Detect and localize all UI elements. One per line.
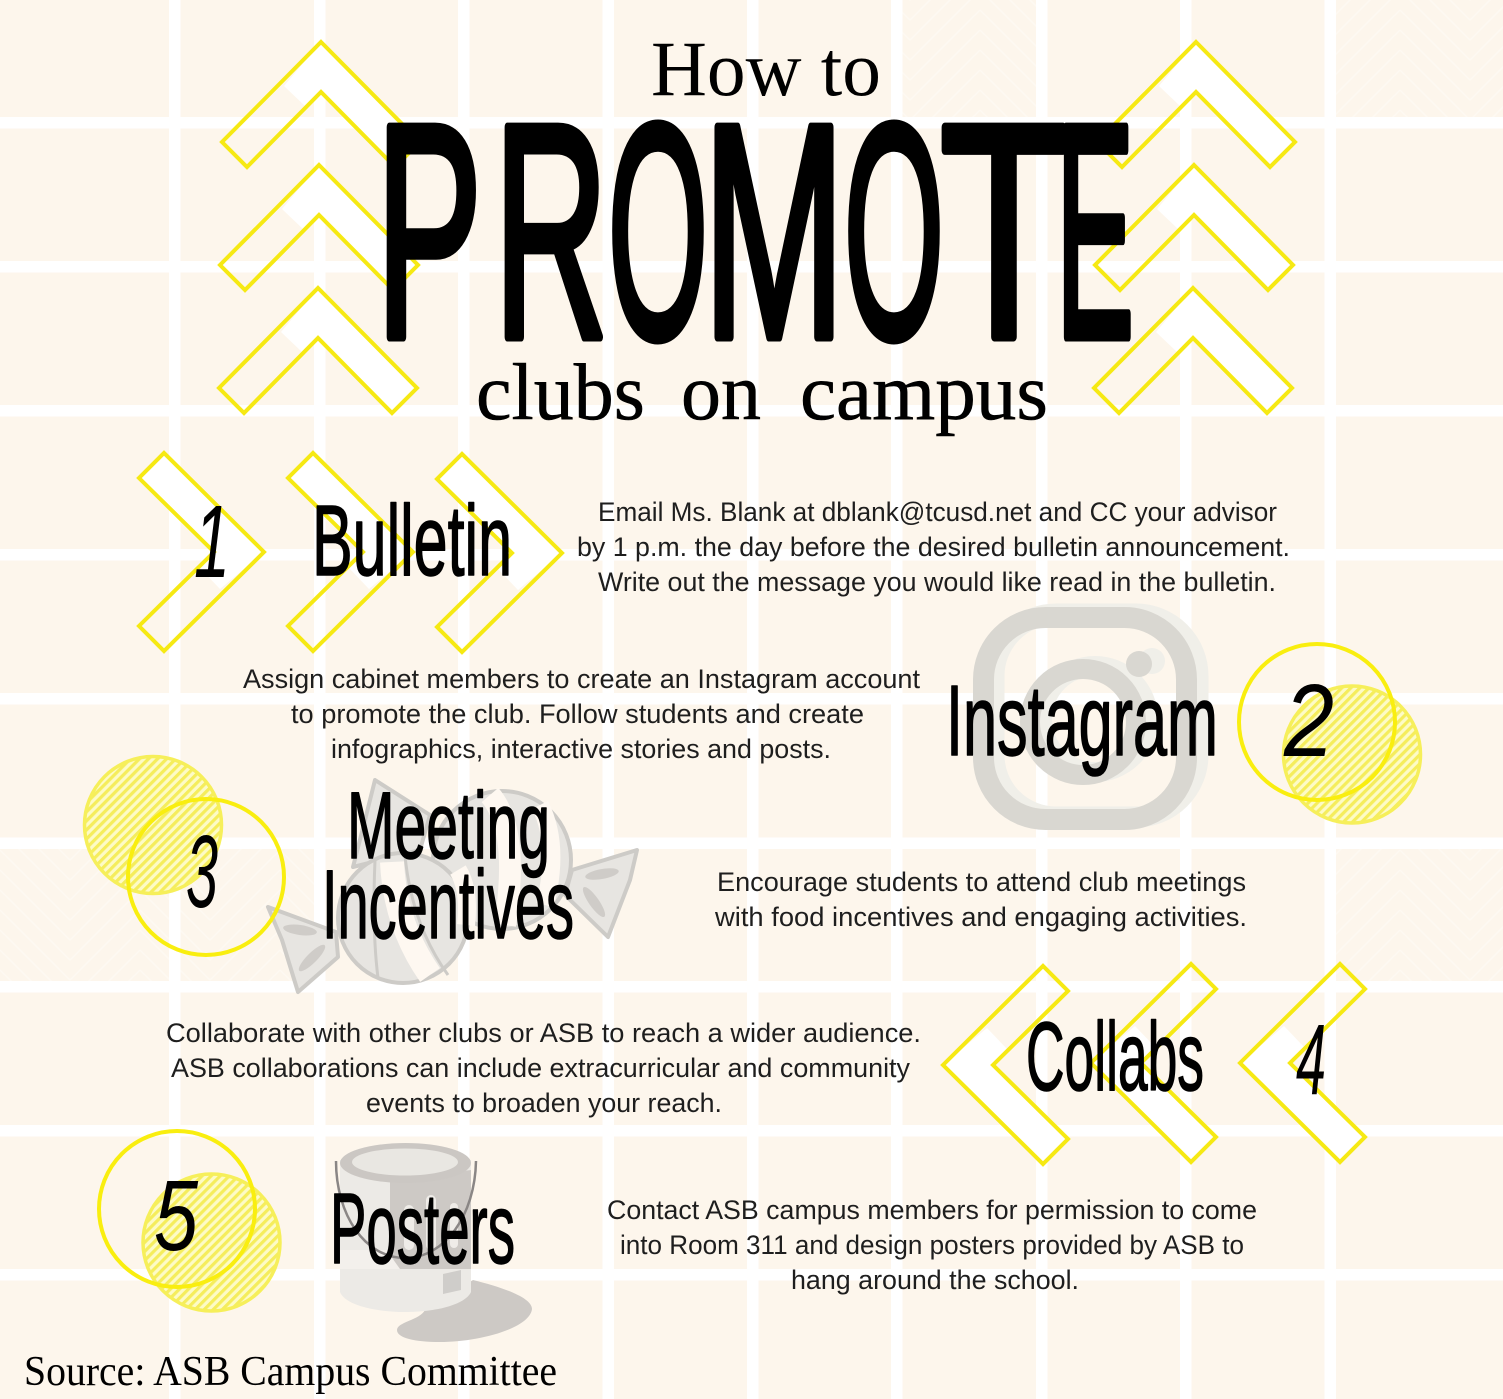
step 1 heading: Bulletin: Bulletin	[312, 485, 512, 597]
icon: left up chevrons	[219, 42, 420, 413]
title: PROMOTE: M	[703, 61, 845, 402]
step 5 description: hang around the school.	[791, 1265, 1079, 1295]
step 3 heading: Meeting Incentives: Meeting	[347, 773, 550, 879]
icon: paint bucket	[336, 1143, 532, 1342]
step 3 description: with food incentives and engaging activities.	[714, 902, 1247, 932]
step 2 description: infographics, interactive stories and posts.	[331, 734, 831, 764]
step 4 number: 4	[1296, 1004, 1326, 1116]
step 1 description: Write out the message you would like read in the bulletin.	[598, 567, 1276, 597]
step 4 description	[166, 1018, 921, 1118]
step 3 heading: Meeting Incentives	[322, 773, 574, 959]
icon: right up chevrons	[1094, 42, 1295, 413]
step 2 description	[243, 664, 920, 764]
step 2 circles	[1239, 644, 1420, 823]
step 4 heading: Collabs: Collabs	[1026, 1002, 1204, 1111]
step 2 description: to promote the club. Follow students and create	[291, 699, 864, 729]
step 2 description: Assign cabinet members to create an Instagram account	[243, 664, 920, 694]
step 3 heading: Meeting Incentives: Incentives	[322, 850, 574, 959]
title: PROMOTE: R	[494, 61, 608, 402]
step 5 description	[607, 1195, 1257, 1295]
step 1 description: by 1 p.m. the day before the desired bulletin announcement.	[577, 532, 1290, 562]
step 4 description: ASB collaborations can include extracurricular and community	[171, 1053, 910, 1083]
step 5 heading: Posters: Posters	[330, 1173, 515, 1285]
step 5 description: Contact ASB campus members for permission to come	[607, 1195, 1257, 1225]
step 2 heading: Instagram: Instagram	[946, 665, 1218, 777]
title: PROMOTE: O	[844, 61, 944, 402]
step 2 number: 2	[1283, 663, 1334, 778]
title: PROMOTE: P	[376, 61, 482, 402]
step 3 description	[714, 867, 1247, 932]
step 3 circles	[84, 756, 284, 955]
text: E	[1056, 61, 1134, 402]
step 3 description: Encourage students to attend club meetings	[717, 867, 1246, 897]
step 5 description: into Room 311 and design posters provided by ASB to	[620, 1230, 1244, 1260]
step 3 number: 3	[186, 814, 218, 929]
step 1 description: Email Ms. Blank at dblank@tcusd.net and CC your advisor	[598, 497, 1277, 527]
step 1 number: 1	[194, 484, 230, 599]
title: PROMOTE: T	[940, 61, 1068, 402]
step 4 description: events to broaden your reach.	[366, 1088, 722, 1118]
icon: candies	[268, 780, 637, 992]
step 5 number: 5	[154, 1160, 198, 1272]
title: clubs on campus: campus	[800, 349, 1048, 437]
step 5 circles	[99, 1131, 280, 1311]
title: clubs on campus: clubs	[476, 349, 645, 437]
step 4 description: Collaborate with other clubs or ASB to reach a wider audience.	[166, 1018, 921, 1048]
step 4 chevrons	[943, 964, 1365, 1164]
title: clubs on campus: on	[681, 349, 761, 437]
source credit: Source: ASB Campus Committee	[24, 1349, 557, 1395]
step 1 description	[577, 497, 1290, 597]
icon: instagram logo	[984, 614, 1198, 820]
step 1 chevrons	[139, 453, 562, 652]
title: PROMOTE: O	[608, 61, 708, 402]
title: How to: How to	[651, 25, 881, 112]
